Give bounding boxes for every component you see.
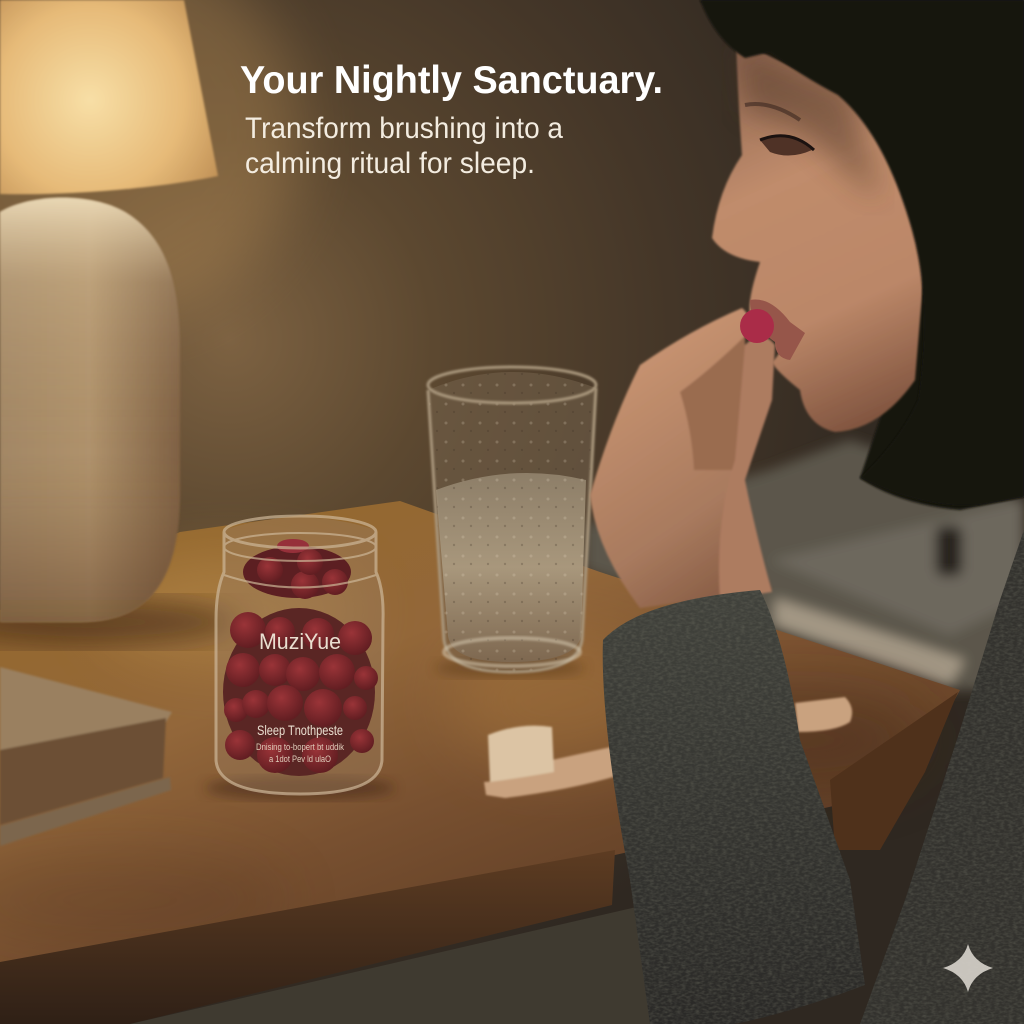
face [712,40,925,432]
eye and brow [745,104,814,156]
pills inside jar [223,539,378,776]
lamp shade glow [0,0,300,320]
woman's hair back [700,0,1024,510]
lamp base [0,198,180,622]
hand [590,308,775,608]
jar glass outline [216,516,383,794]
jar: Sleep Tnothpeste [257,722,343,738]
hair front [700,0,1024,506]
desk front edge [0,850,615,1024]
lamp [0,0,300,646]
lamp light on desk [100,555,360,665]
palm and index finger [590,308,772,608]
lips [750,299,805,360]
headline text: calming ritual for sleep. [245,147,535,180]
cabinet below desk [130,905,650,1024]
sweater sleeve [603,590,865,1024]
thumb [719,336,775,600]
lamp shade [0,0,218,194]
glass of water [428,367,596,678]
sink in background [585,440,1024,690]
pill held in fingers [740,309,774,343]
headline text: Transform brushing into a [245,112,563,145]
forehead shadow [736,45,880,200]
desk [0,501,960,1024]
headline text: Your Nightly Sanctuary. [240,59,663,102]
jar [205,516,395,800]
jar: Dnising to-bopert bt uddik [256,742,344,752]
jar label text: MuziYue [259,629,341,654]
headline text [240,59,663,180]
sweater body [860,530,1024,1024]
icon: sparkle star [943,944,993,992]
toothbrush [484,697,852,798]
book [0,667,172,846]
jar: a 1dot Pev ld ulaO [269,754,331,764]
curled fingers [675,335,745,470]
